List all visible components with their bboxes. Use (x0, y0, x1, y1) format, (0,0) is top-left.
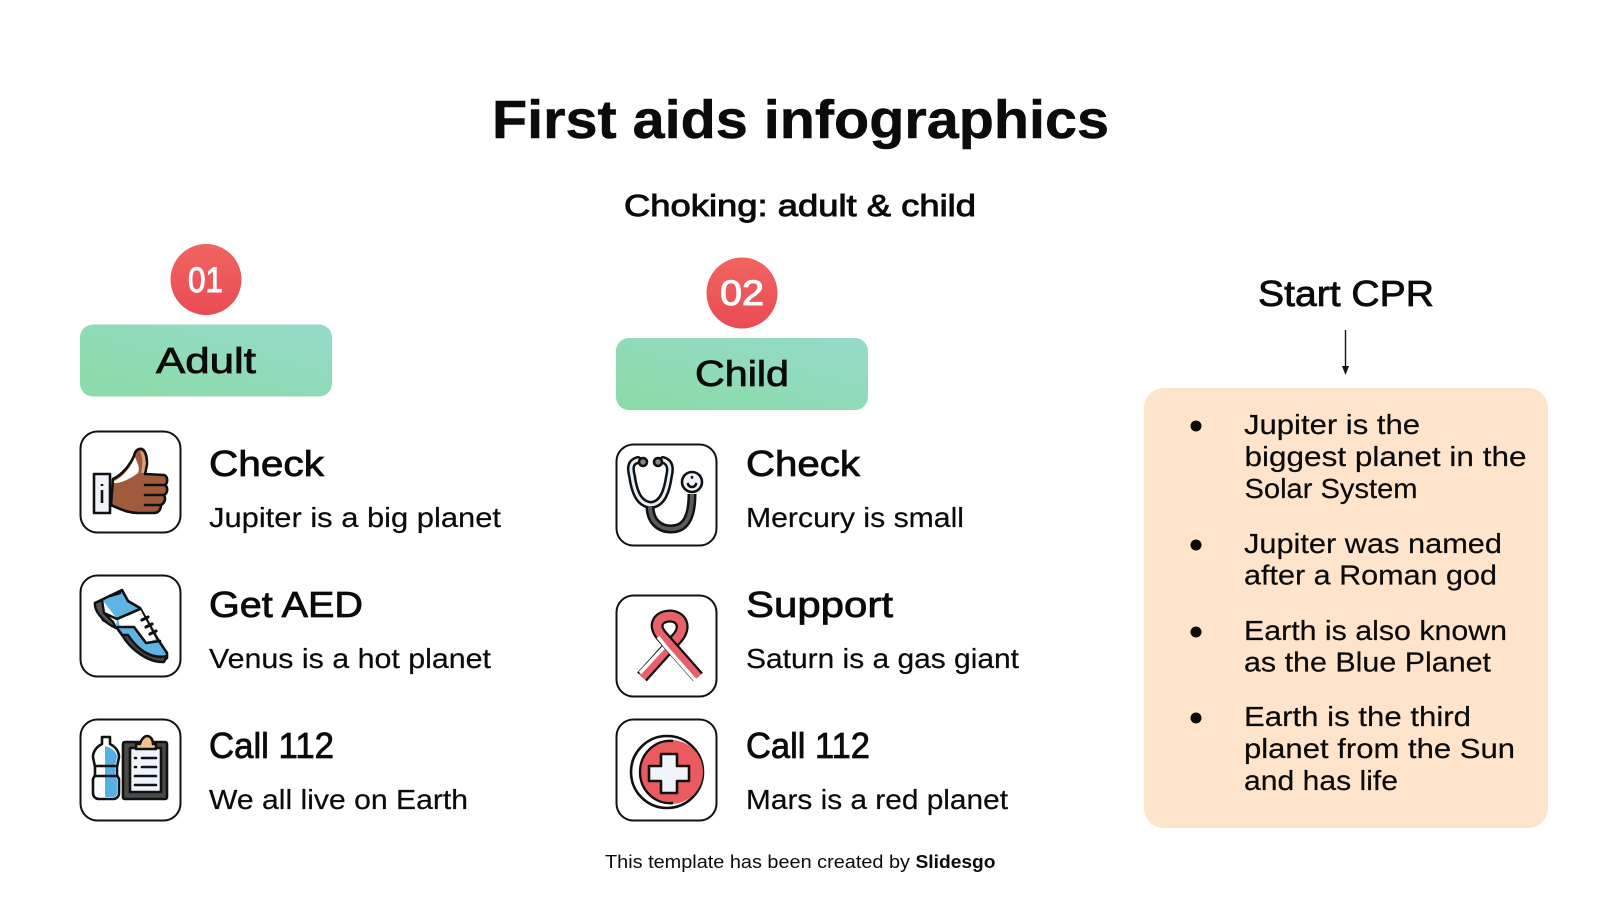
step: Get AED: Venus is a hot planet (209, 643, 491, 674)
bullet: Jupiter was named: Jupiter was named (1244, 528, 1502, 559)
number badge 02: 02 (720, 274, 764, 313)
arrow: down to CPR panel (1342, 330, 1349, 375)
footer credit: This template has been created by (605, 852, 910, 872)
step: Call 112: Call 112 (746, 725, 870, 766)
number badge 01 (170, 244, 242, 315)
heading: Adult: Adult (156, 340, 256, 381)
heading: Child (616, 338, 868, 410)
step: Call 112: We all live on Earth (209, 784, 468, 815)
heading: Child: Child (695, 353, 789, 394)
heading: Start CPR: Start CPR (1258, 273, 1434, 314)
subtitle: Choking: adult & child (624, 188, 976, 223)
panel: CPR notes (1144, 388, 1548, 828)
step: Check: Mercury is small (746, 502, 964, 533)
icon: ribbon (616, 596, 716, 696)
step: Support (746, 584, 1019, 674)
step: Support: Support (746, 584, 893, 625)
bullet: Earth third planet: planet from the Sun (1244, 733, 1515, 764)
step: Check (746, 443, 964, 533)
number badge 01: 01 (188, 261, 223, 300)
step: Check: Check (746, 443, 861, 484)
bullet: Earth also known: as the Blue Planet (1244, 646, 1491, 678)
panel: child column (616, 258, 1019, 820)
step: Check: Check (209, 443, 325, 484)
icon: stethoscope (616, 444, 716, 546)
step: Check: Jupiter is a big planet (209, 502, 501, 533)
step: Call 112 (746, 725, 1008, 815)
bullet: Jupiter was named: after a Roman god (1244, 560, 1497, 590)
icon: medical cross (616, 720, 716, 820)
step: Get AED (209, 584, 491, 674)
panel: adult column (80, 244, 501, 820)
heading: Adult (80, 324, 332, 396)
title: First aids infographics (492, 90, 1109, 150)
bullet: Earth third planet: Earth is the third (1244, 701, 1471, 732)
icon: running shoe (80, 576, 180, 676)
bullet: Jupiter is the biggest planet: Jupiter is the (1244, 409, 1420, 440)
number badge 02 (706, 258, 778, 328)
bullet: Jupiter was named (1190, 528, 1502, 590)
bullet: Jupiter is the biggest planet: biggest planet in the (1244, 441, 1526, 472)
bullet: Earth also known: Earth is also known (1244, 615, 1507, 646)
step: Call 112: Mars is a red planet (746, 784, 1008, 815)
footer credit: Slidesgo (916, 852, 996, 872)
bullet: Earth third planet: and has life (1244, 765, 1398, 796)
step: Call 112 (209, 725, 468, 815)
step: Support: Saturn is a gas giant (746, 643, 1019, 674)
step: Check (209, 443, 501, 533)
bullet: Jupiter is the biggest planet: Solar System (1244, 473, 1418, 504)
step: Get AED: Get AED (209, 584, 363, 625)
step: Call 112: Call 112 (209, 725, 334, 766)
bullet: Jupiter is the biggest planet (1190, 409, 1526, 504)
icon: thumbs up (80, 432, 180, 532)
bullet: Earth third planet (1190, 701, 1515, 796)
bullet: Earth also known (1190, 615, 1507, 678)
icon: bottle and clipboard (80, 720, 180, 820)
